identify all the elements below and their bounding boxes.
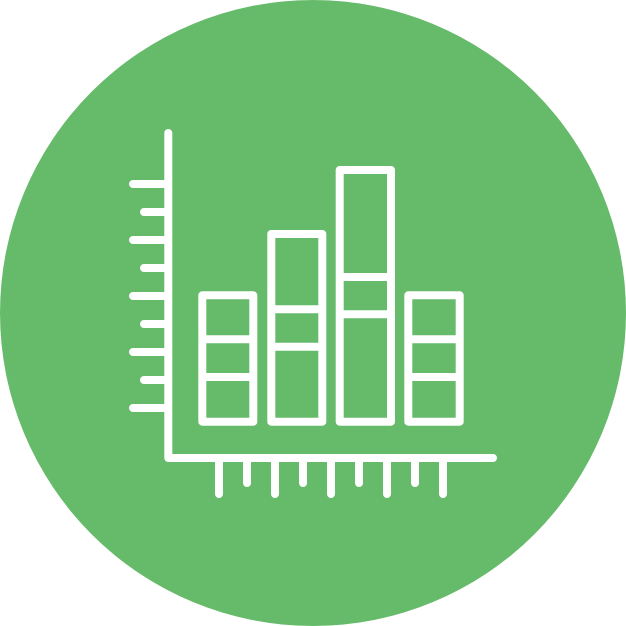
bar 3 [340,170,391,422]
bar 1 [202,295,253,422]
chart line art [133,133,493,494]
bar 2 [271,234,322,422]
axes [168,133,493,458]
x-axis ticks [219,458,443,494]
bar 4 [408,295,460,422]
y-axis ticks [133,184,168,408]
